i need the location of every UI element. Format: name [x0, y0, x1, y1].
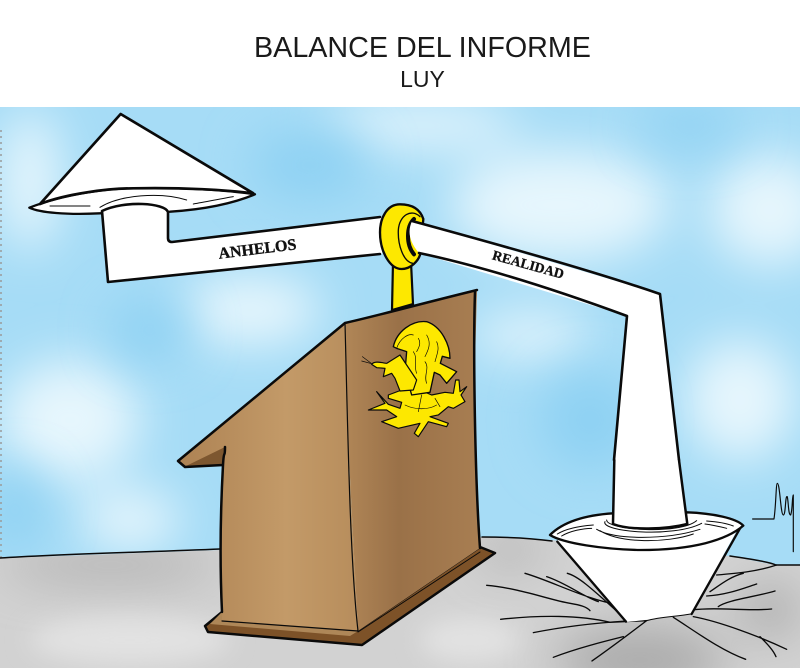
cactus and leaves	[368, 380, 467, 437]
cracks in the ground	[487, 565, 787, 661]
label: REALIDAD: REALIDAD	[491, 248, 566, 282]
coat of arms	[362, 322, 467, 437]
podium base	[205, 547, 495, 645]
pipe: ANHELOS	[101, 203, 382, 282]
eagle feathers	[397, 335, 438, 383]
title: BALANCE DEL INFORME	[254, 32, 591, 64]
cone top (aspirations)	[29, 114, 255, 214]
eagle wing and tail	[393, 322, 457, 395]
cone rim	[29, 188, 255, 214]
podium outlines	[178, 290, 480, 612]
ground	[0, 536, 800, 668]
sky background	[0, 107, 800, 565]
column foot	[613, 460, 687, 528]
lectern lip underside	[184, 447, 225, 467]
label: ANHELOS: ANHELOS	[218, 236, 297, 263]
podium side panel	[345, 290, 480, 631]
pipe: REALIDAD	[410, 221, 687, 523]
left edge speckle	[0, 130, 2, 668]
bowl base	[487, 460, 787, 661]
cone body	[40, 114, 253, 204]
ring stem	[392, 262, 413, 310]
yellow ring	[380, 204, 423, 269]
author credit: LUY	[400, 66, 445, 92]
eagle head and snake	[372, 355, 417, 391]
bowl rim	[550, 512, 743, 550]
podium front panel	[178, 323, 358, 631]
signature	[753, 483, 793, 552]
podium	[178, 290, 495, 645]
